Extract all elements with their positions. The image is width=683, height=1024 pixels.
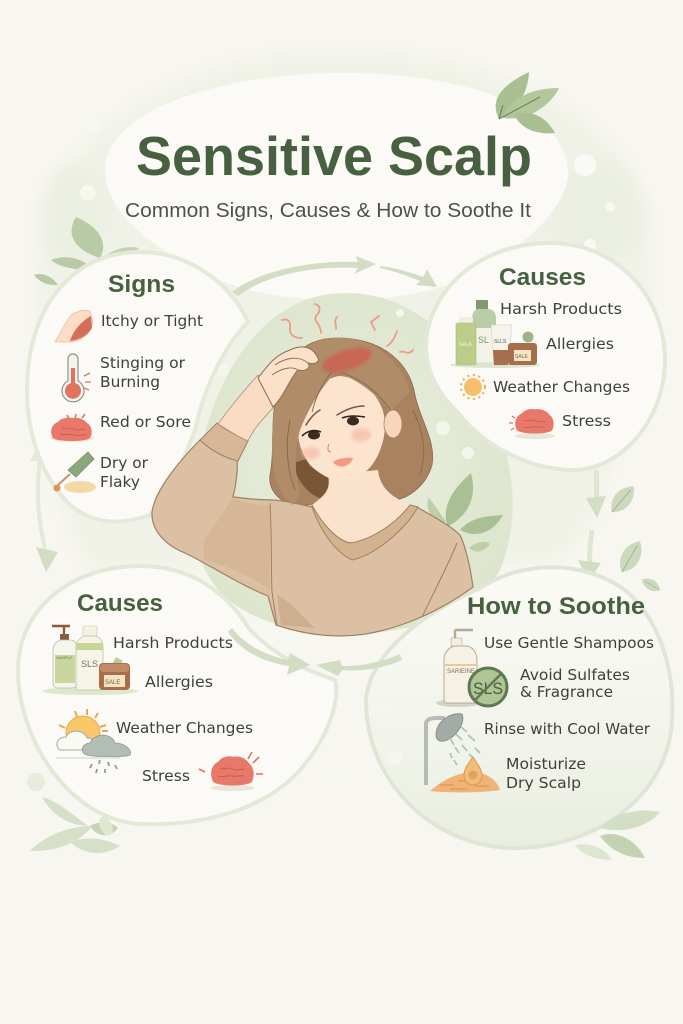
label: stinging: Stinging or [100,354,186,372]
label: stress lower: Stress [142,767,190,785]
label: gentle: Use Gentle Shampoos [484,634,654,652]
back hair [270,338,433,505]
front hair [272,338,410,505]
ear [384,410,402,438]
arrow: left side arrow [33,441,58,572]
label: burning: Burning [100,373,160,391]
icon: bottom right leaves [575,811,660,860]
icon: leaves beside woman [428,473,503,551]
icon: right side leaves [606,481,663,595]
label: dry scalp: Dry Scalp [506,774,581,792]
sweater shadows [204,498,270,590]
label: allergies: Allergies [546,335,614,353]
icon: bottom left leaves [27,773,120,853]
panel: title bubble [105,73,568,300]
red scalp patch [319,342,375,378]
label: avoid: Avoid Sulfates [520,666,630,684]
arrow: lower left arrow [228,628,310,675]
icon: product bottles [450,300,540,368]
icon: shampoo with no sls: SARIEINE [447,669,475,675]
label: harsh lower: Harsh Products [113,634,233,652]
illustration: woman scratching her scalp [152,304,473,636]
icon: brain stress [509,409,555,439]
label: weather lower: Weather Changes [116,719,253,737]
label: harsh: Harsh Products [500,300,622,318]
background green swirl [38,52,652,570]
forearm [218,375,275,441]
icon: product bottles: SLLS [494,339,507,345]
mouth [333,458,353,467]
label: flaky: Flaky [100,473,140,491]
panel: causes lower [18,566,336,824]
panel: causes upper [426,243,665,470]
eyes [302,406,365,440]
cuff [200,423,248,461]
heading: how to soothe: How to Soothe [467,593,645,620]
label: fragrance: & Fragrance [520,683,613,701]
icon: product bottles: SL [478,335,489,345]
centre blob sparkles [217,309,474,459]
icon: brain stress lower [199,752,263,791]
icon: top right leaves [496,72,559,133]
sweater [152,440,473,636]
heading: signs: Signs [108,271,175,298]
icon: shampoo with no sls [436,630,507,707]
label: red: Red or Sore [100,413,191,431]
heading: causes lower: Causes [77,590,163,617]
label: stress: Stress [562,412,611,430]
decorative spots [321,682,408,784]
arrow: top second arrow [380,266,437,287]
icon: sun [461,375,485,399]
label: moisturize: Moisturize [506,755,586,773]
icon: lower product bottles: SAMPLE [56,655,73,660]
subtitle: Common Signs, Causes & How to Soothe It [125,200,531,222]
icon: dropper and flakes [54,452,96,493]
icon: leaves behind signs [34,217,139,285]
icon: moisture drop on dry scalp [430,757,500,792]
heading: causes upper: Causes [499,264,586,291]
panel: centre green circle [195,293,513,634]
label: itchy: Itchy or Tight [101,312,203,330]
icon: shampoo with no sls: SLS [473,679,503,698]
icon: lower product bottles: SLS [81,659,98,669]
icon: lower product bottles: SALE [105,680,120,686]
icon: sun and clouds [56,709,131,773]
panel: signs [27,252,248,522]
label: rinse: Rinse with Cool Water [484,720,651,738]
icon: product bottles: SALE [515,354,528,360]
label: weather: Weather Changes [493,378,630,396]
arrow: right side arrows [578,470,606,581]
icon: lower product bottles [42,626,138,695]
icon: red brain [50,414,94,442]
label: dry: Dry or [100,454,149,472]
panel: how to soothe [366,567,672,848]
title: Sensitive Scalp [136,125,532,187]
label: allergies lower: Allergies [145,673,213,691]
sweater collar [312,505,418,560]
hand [258,347,318,407]
arrow: top curved arrow [232,256,376,296]
face [298,376,385,482]
dark hair under chin [293,458,345,501]
arrow: lower right arrow [316,654,402,676]
icon: product bottles: SALA [459,342,472,348]
blush [302,428,371,459]
icon: thermometer [62,354,91,402]
neck [312,470,417,543]
irritation squiggles [282,304,413,353]
icon: itchy hand [55,310,93,342]
nose [328,444,331,452]
hair strands [287,372,424,490]
icon: shower [426,714,480,785]
